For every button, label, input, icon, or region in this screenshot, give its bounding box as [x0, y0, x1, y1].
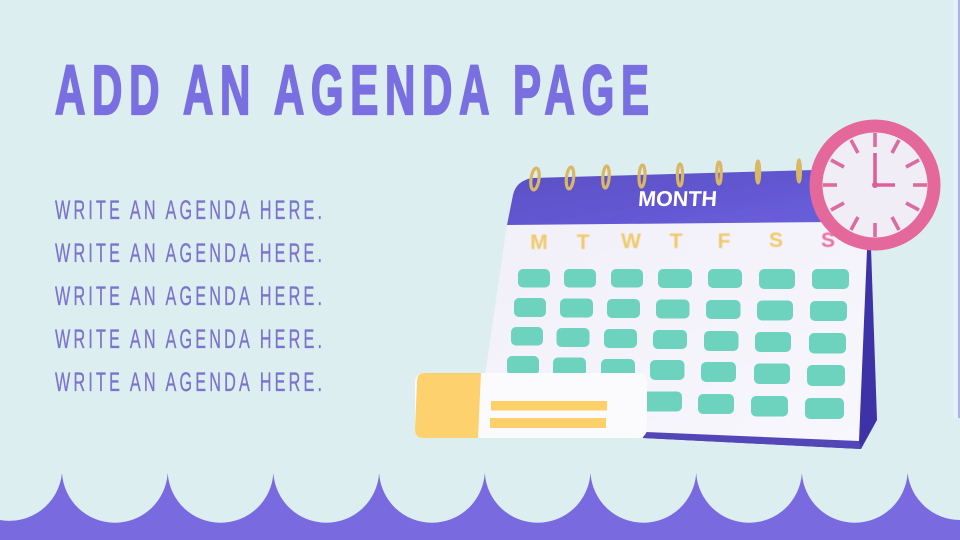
agenda list: WRITE AN AGENDA HERE.	[55, 324, 322, 354]
agenda list: WRITE AN AGENDA HERE.	[55, 367, 322, 397]
weekday letters: W	[621, 230, 641, 253]
calendar illustration	[478, 160, 877, 449]
agenda list: WRITE AN AGENDA HERE.	[55, 238, 322, 268]
clock ring	[810, 120, 940, 250]
note card	[415, 373, 647, 438]
weekday letters	[530, 229, 835, 254]
scalloped wave footer	[0, 473, 960, 540]
calendar back stand	[643, 246, 877, 449]
date cells	[507, 269, 849, 419]
weekday letters: S	[821, 229, 835, 252]
weekday letters: F	[718, 230, 731, 253]
binder rings	[530, 160, 800, 190]
clock	[810, 120, 940, 250]
bottom strip	[643, 431, 861, 449]
calendar header	[507, 170, 830, 225]
weekday letters: T	[670, 230, 683, 253]
weekday letters: M	[530, 231, 548, 254]
agenda list: WRITE AN AGENDA HERE.	[55, 195, 322, 225]
weekday letters: T	[577, 231, 590, 254]
clock ticks	[823, 133, 927, 237]
clock hands	[875, 153, 895, 185]
agenda list: WRITE AN AGENDA HERE.	[55, 281, 322, 311]
calendar page	[478, 222, 867, 441]
weekday letters: S	[769, 229, 783, 252]
clock face	[822, 132, 928, 238]
month label: MONTH	[637, 187, 718, 211]
card lines	[491, 401, 607, 410]
card yellow tab	[415, 373, 481, 438]
title: ADD AN AGENDA PAGE	[55, 52, 649, 130]
card body	[415, 373, 647, 438]
agenda list	[55, 195, 322, 397]
